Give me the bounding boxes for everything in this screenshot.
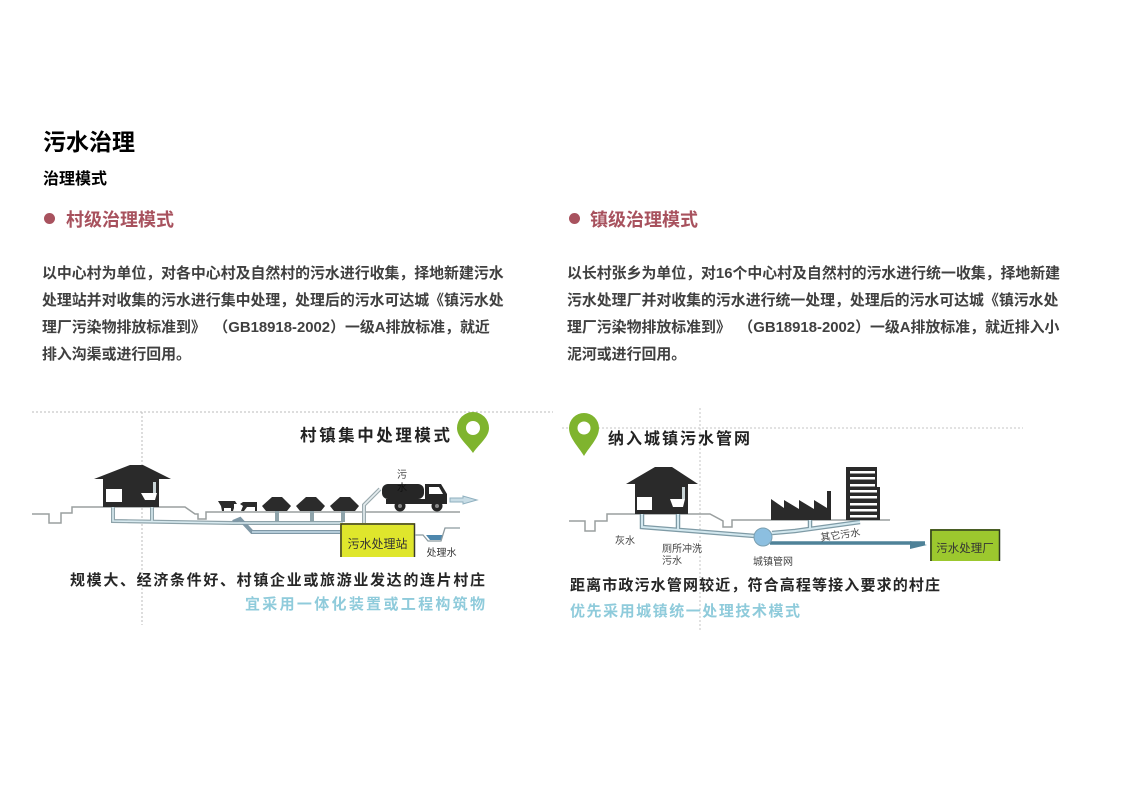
caption: recommended approach: 优先采用城镇统一处理技术模式 xyxy=(570,602,800,620)
text block: town level description xyxy=(567,265,1060,363)
icon: factory xyxy=(771,491,831,520)
heading: town level mode: 镇级治理模式 xyxy=(590,210,698,230)
heading: village level mode: 村级治理模式 xyxy=(66,210,174,230)
icon: sewage truck xyxy=(382,469,447,512)
icon: small houses xyxy=(262,497,359,511)
treatment station box: 污水处理站 xyxy=(347,537,408,551)
text block: town level description: 泥河或进行回用。 xyxy=(567,347,686,363)
bullet: village level xyxy=(44,213,55,224)
icon: green map pin xyxy=(457,412,489,453)
ground line xyxy=(32,507,460,523)
caption: applicable villages: 规模大、经济条件好、村镇企业或旅游业发达的连片村庄 xyxy=(70,571,485,589)
diagram: village centralized treatment xyxy=(32,412,553,625)
sewer node xyxy=(754,528,772,546)
arrow: truck outflow xyxy=(450,496,477,504)
pipe labels xyxy=(615,526,861,568)
caption: recommended approach: 宜采用一体化装置或工程构筑物 xyxy=(245,595,485,613)
treated water outflow xyxy=(415,528,460,559)
text block: town level description: 以长村张乡为单位，对16个中心村及自然村的污水进行统一收集，择地新建 xyxy=(567,266,1060,282)
icon: cows xyxy=(218,501,257,511)
text block: village level description xyxy=(42,265,504,363)
treated water outflow: 处理水 xyxy=(426,547,456,559)
caption: applicable villages: 距离市政污水管网较近，符合高程等接入要求的村庄 xyxy=(570,576,940,594)
pipes xyxy=(113,489,380,532)
text block: village level description: 以中心村为单位，对各中心村及自然村的污水进行收集，择地新建污水 xyxy=(42,266,504,282)
treatment station box xyxy=(340,523,415,557)
icon: sewage truck: 水 xyxy=(397,482,407,494)
subtitle: 治理模式 xyxy=(43,171,107,188)
treatment plant box xyxy=(930,529,1000,561)
treatment plant box: 污水处理厂 xyxy=(936,542,994,555)
diagram: connect to town sewer network xyxy=(562,408,1023,630)
text block: village level description: 处理站并对收集的污水进行集中处理，处理后的污水可达城《镇污水处 xyxy=(42,293,504,309)
icon: sewage truck: 污 xyxy=(397,469,407,481)
bullet: town level xyxy=(569,213,580,224)
arrow: main sewer to plant xyxy=(910,541,927,549)
icon: house xyxy=(94,465,171,507)
icon: green map pin xyxy=(569,413,599,456)
pipe labels: 其它污水 xyxy=(820,526,861,544)
text block: town level description: 理厂污染物排放标准到》 （GB18918-2002）一级A排放标准，就近排入小 xyxy=(567,320,1059,336)
pipe labels: 城镇管网 xyxy=(753,555,793,568)
ground line xyxy=(569,514,890,531)
text block: village level description: 排入沟渠或进行回用。 xyxy=(42,347,191,363)
icon: house xyxy=(626,467,698,514)
pipe labels: 污水 xyxy=(662,555,682,567)
text block: town level description: 污水处理厂并对收集的污水进行统一处理，处理后的污水可达城《镇污水处 xyxy=(567,293,1058,309)
diagram title: 村镇集中处理模式 xyxy=(300,425,450,445)
text block: village level description: 理厂污染物排放标准到》 （GB18918-2002）一级A排放标准，就近 xyxy=(42,320,490,336)
title: 污水治理 xyxy=(43,129,135,155)
pipes xyxy=(642,514,925,543)
diagram title: 纳入城镇污水管网 xyxy=(608,429,750,448)
icon: office building xyxy=(846,467,880,520)
pipe labels: 灰水 xyxy=(615,534,635,547)
pipe labels: 厕所冲洗 xyxy=(662,542,702,555)
